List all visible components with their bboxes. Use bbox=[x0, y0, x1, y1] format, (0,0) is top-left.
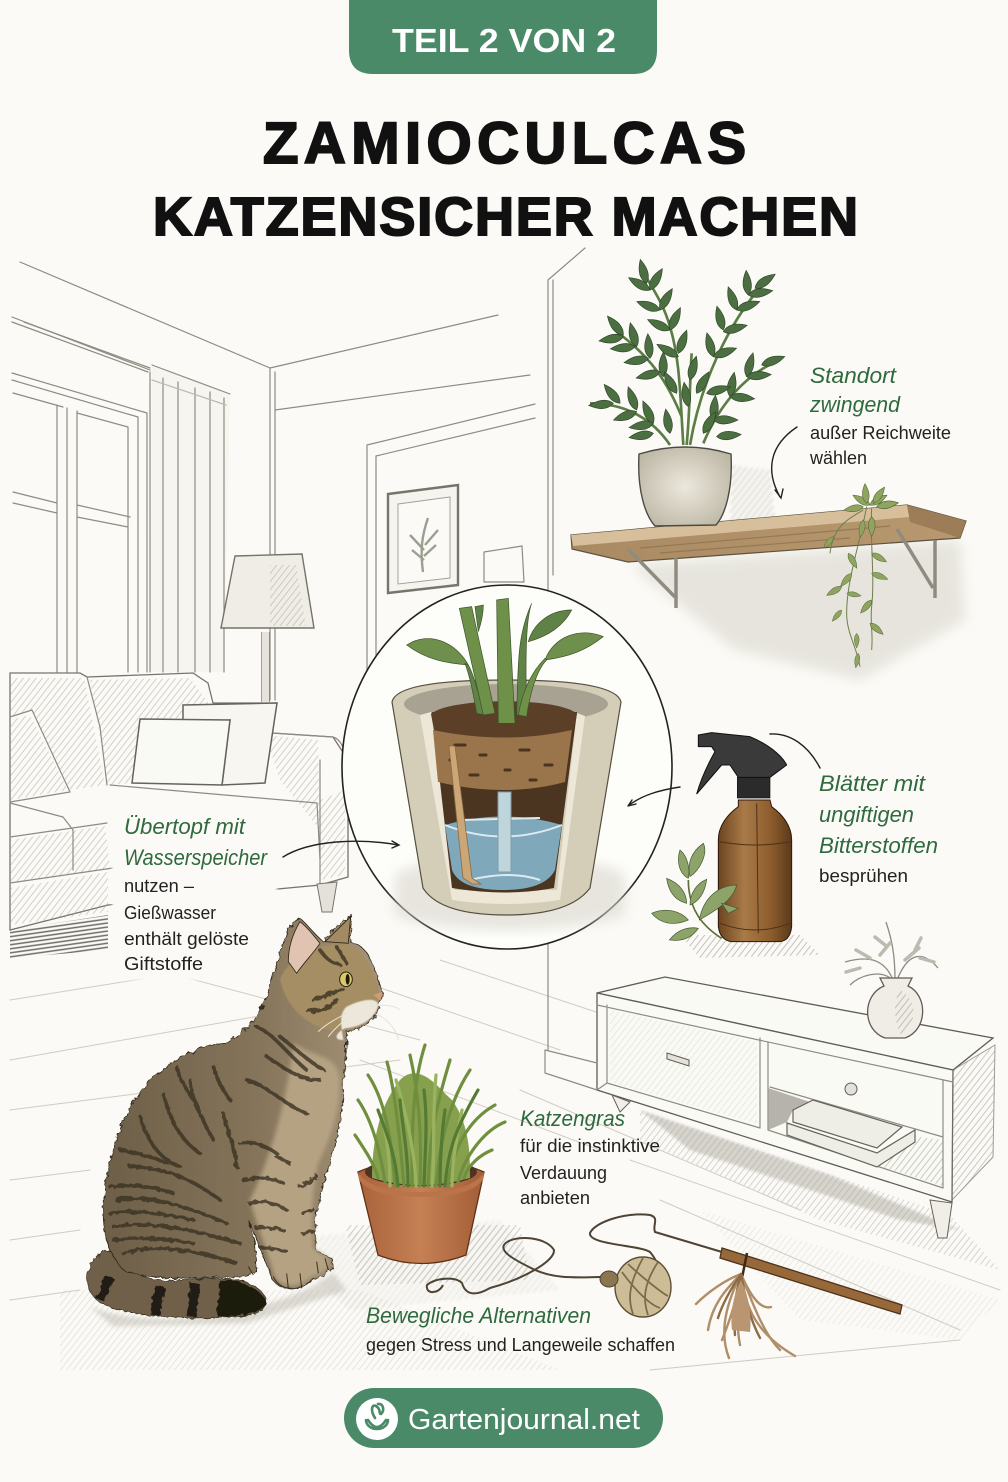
trailing plant bbox=[822, 483, 899, 668]
pot shadow bbox=[730, 465, 775, 525]
drawer hatching bbox=[610, 1010, 757, 1124]
cat eye bbox=[340, 972, 352, 987]
wick bbox=[449, 746, 481, 884]
arrow: to spray bbox=[770, 734, 820, 768]
small branch bbox=[652, 843, 738, 940]
pot front rim and inner wall bbox=[420, 712, 585, 904]
callout: Standort: Standort bbox=[810, 363, 897, 388]
callout: Bewegliche Alternativen: gegen Stress und Langeweile schaffen bbox=[366, 1335, 675, 1355]
walls and ceiling lines bbox=[20, 248, 585, 1050]
plant stems and leaves bbox=[407, 598, 603, 723]
picture frame bbox=[388, 485, 524, 593]
pot cut interior bbox=[432, 712, 577, 892]
footer brand pill bbox=[344, 1388, 663, 1448]
pot front rim bbox=[358, 1172, 484, 1197]
concrete pot bbox=[639, 447, 731, 526]
callout: Bewegliche Alternativen: Bewegliche Alternativen bbox=[366, 1303, 591, 1328]
cat toys bbox=[427, 1214, 902, 1358]
console side bbox=[952, 1045, 995, 1200]
callout: Bitterstoffe: Bitterstoffen bbox=[819, 833, 938, 858]
under sofa shadow bbox=[10, 915, 108, 958]
callout: Standort bbox=[809, 363, 951, 468]
water highlight bbox=[445, 818, 562, 880]
feather bbox=[696, 1274, 795, 1358]
cat light chest and legs bbox=[250, 1043, 340, 1286]
wand ring bbox=[742, 1253, 747, 1278]
magnifier circle with cross-section pot bbox=[342, 585, 672, 949]
toy string to ball bbox=[427, 1238, 600, 1293]
tail tip bbox=[217, 1280, 267, 1317]
substrate specks bbox=[450, 745, 552, 780]
cat far ear bbox=[325, 917, 351, 943]
cat tail bbox=[87, 1250, 266, 1318]
callout: Standort: zwingend bbox=[809, 392, 901, 417]
cat paws bbox=[248, 1258, 328, 1289]
curtain bbox=[12, 317, 230, 672]
callout: Katzengras: für die instinktive bbox=[520, 1136, 660, 1156]
grass mass bbox=[372, 1073, 470, 1185]
substrate section bbox=[433, 730, 572, 790]
sofa pillow front bbox=[132, 719, 230, 785]
door frame bbox=[367, 404, 535, 690]
callout: Katzengras: Verdauung bbox=[520, 1163, 607, 1183]
circle bbox=[342, 585, 672, 949]
zamioculcas plant bbox=[588, 258, 786, 445]
cat nose bbox=[373, 992, 383, 1001]
callout: Übertopf: Wasserspeicher bbox=[124, 845, 269, 870]
shelf wall shadow bbox=[630, 540, 965, 680]
spray bottle bbox=[652, 733, 820, 958]
cat muzzle white bbox=[337, 1000, 378, 1040]
callout: Übertopf: nutzen – bbox=[124, 876, 194, 896]
cat body bbox=[103, 915, 383, 1289]
console top bbox=[597, 977, 993, 1070]
window bbox=[12, 322, 150, 672]
floor lines and shading bbox=[10, 960, 1000, 1370]
sofa bbox=[10, 673, 348, 958]
cat head light bbox=[280, 945, 380, 1030]
console front bbox=[597, 993, 953, 1202]
cat pupil bbox=[346, 974, 350, 985]
callout: Katzengras: anbieten bbox=[520, 1188, 590, 1208]
grass blades bbox=[355, 1045, 505, 1186]
tabby cat bbox=[87, 915, 400, 1327]
sofa leg bbox=[317, 882, 337, 912]
soil opening bbox=[365, 1158, 477, 1186]
cat stripes bbox=[110, 947, 347, 1263]
footer brand pill: Gartenjournal.net bbox=[408, 1404, 640, 1436]
yarn ball bbox=[600, 1257, 671, 1317]
callout: Übertopf: Übertopf mit bbox=[124, 814, 246, 839]
callout: Bitterstoffe bbox=[819, 771, 938, 886]
callout: Katzengras: Katzengras bbox=[520, 1106, 625, 1131]
shelf brackets bbox=[628, 529, 935, 608]
brand icon bbox=[356, 1398, 398, 1440]
opening shadow bbox=[768, 1088, 810, 1130]
tv console bbox=[545, 977, 995, 1238]
drawer handle bbox=[667, 1053, 689, 1066]
bottle liquid and rib bbox=[719, 803, 791, 933]
shelf shadow bbox=[880, 1135, 943, 1186]
floor lamp bbox=[221, 554, 314, 702]
callout: Übertopf: Giftstoffe bbox=[124, 954, 203, 974]
pot inner rear bbox=[404, 684, 608, 724]
cat shadow bbox=[90, 1273, 347, 1327]
cat ear inner bbox=[288, 922, 320, 973]
callout: Bitterstoffe: Blätter mit bbox=[819, 771, 926, 796]
cat whiskers bbox=[318, 1005, 400, 1040]
spray head bbox=[697, 733, 787, 794]
arrow: from spray to pot bbox=[628, 787, 680, 806]
bottle cap bbox=[737, 777, 770, 798]
vase with twigs bbox=[845, 922, 938, 1038]
water bbox=[445, 816, 562, 890]
title: KATZENSICHER MACHEN bbox=[153, 187, 858, 247]
cat grass pot bbox=[345, 1045, 530, 1285]
callout: Übertopf: enthält gelöste bbox=[124, 929, 249, 949]
wooden wand bbox=[720, 1248, 902, 1314]
bottle bbox=[718, 800, 792, 942]
wood shelf bbox=[571, 505, 966, 562]
header banner bbox=[349, 0, 657, 74]
title bbox=[153, 111, 858, 247]
console legs bbox=[612, 1095, 952, 1238]
books bbox=[787, 1100, 915, 1167]
bottle shadow bbox=[680, 935, 820, 958]
callout: Bewegliche Alternativen bbox=[366, 1303, 675, 1355]
arrow: to pot bbox=[283, 841, 399, 857]
sofa pillow back bbox=[183, 703, 277, 785]
shelf with plants bbox=[571, 258, 966, 668]
room sketch background bbox=[10, 248, 1000, 1370]
callout: Übertopf: Gießwasser bbox=[124, 903, 216, 923]
pot outer wall bbox=[392, 680, 621, 915]
pot floor shadow bbox=[395, 856, 625, 930]
callout: Bitterstoffe: ungiftigen bbox=[819, 802, 914, 827]
sofa hatching bbox=[10, 678, 345, 925]
terracotta pot bbox=[358, 1158, 484, 1264]
tail rings bbox=[100, 1277, 195, 1317]
callout: Übertopf bbox=[124, 814, 269, 974]
header banner: TEIL 2 VON 2 bbox=[392, 22, 616, 59]
console fronts bbox=[545, 1005, 953, 1188]
callout: Standort: außer Reichweite bbox=[810, 423, 951, 443]
water tube bbox=[498, 792, 511, 872]
callout: Katzengras bbox=[520, 1106, 660, 1208]
sofa back and arm bbox=[10, 673, 348, 930]
toy string to wand bbox=[590, 1214, 722, 1267]
callout: Standort: wählen bbox=[809, 448, 867, 468]
callout: Bitterstoffe: besprühen bbox=[819, 866, 908, 886]
pot shadow bbox=[345, 1225, 530, 1285]
sofa cushions bbox=[10, 677, 348, 885]
arrow: to shelf bbox=[772, 427, 797, 498]
text clearing bbox=[112, 812, 277, 980]
top soil bbox=[431, 701, 577, 738]
title: ZAMIOCULCAS bbox=[263, 111, 746, 176]
drawer knob bbox=[845, 1083, 857, 1095]
